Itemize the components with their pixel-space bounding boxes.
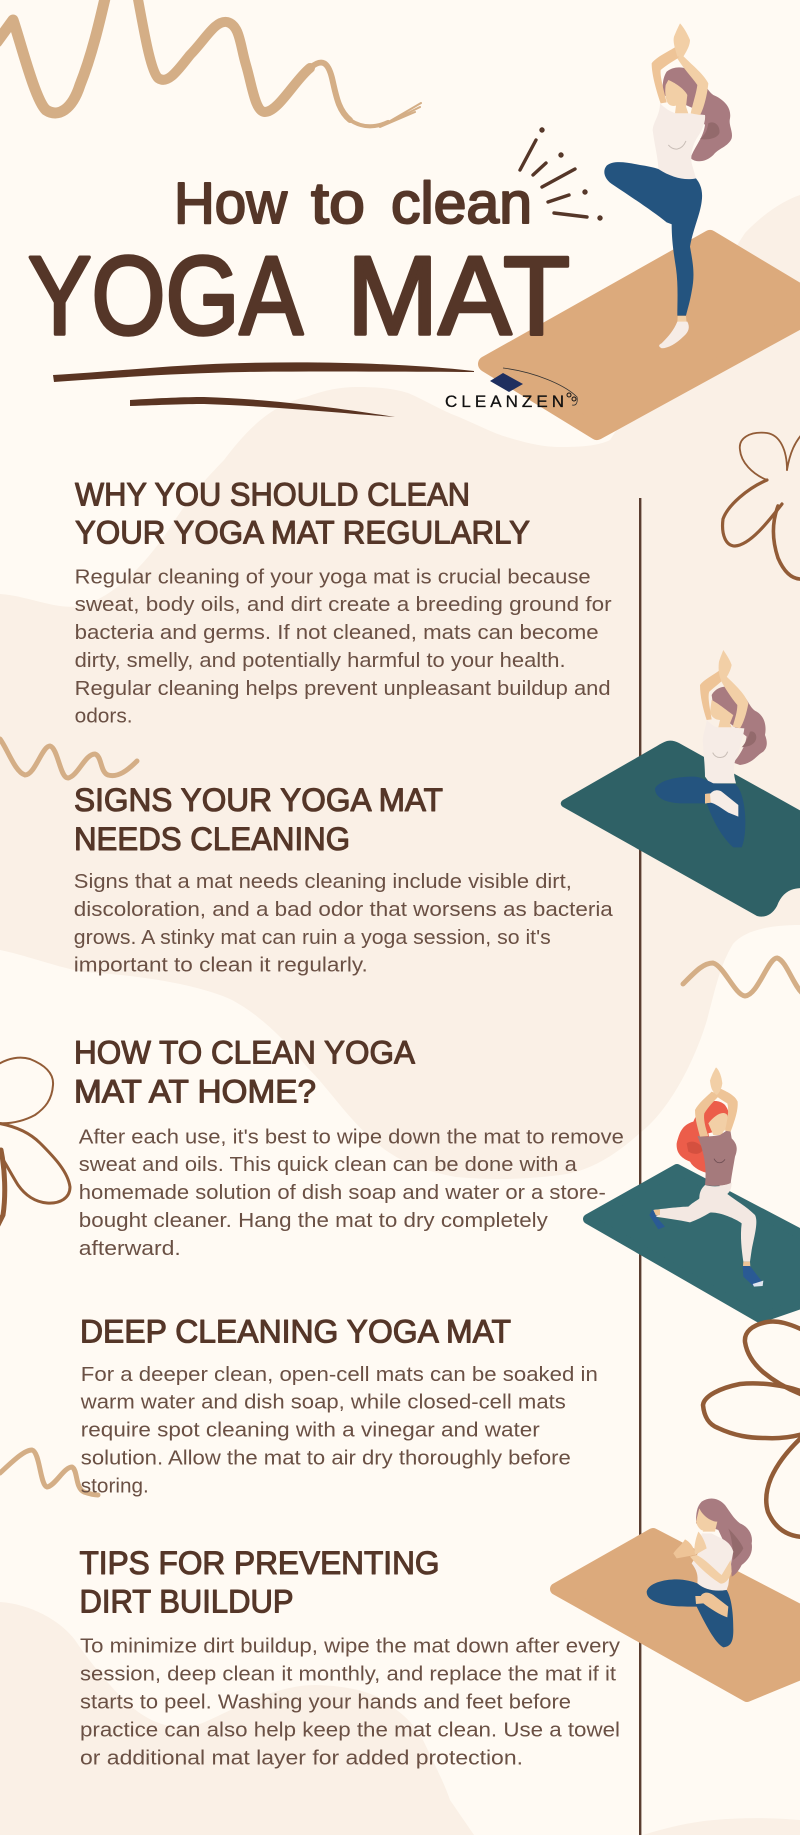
body text — [75, 565, 612, 728]
logo: Cleanzen — [445, 368, 577, 411]
flower: left — [0, 1058, 70, 1225]
body text: Regular cleaning of your yoga mat is crucial because — [75, 565, 591, 588]
title line two: YOGA — [28, 234, 303, 358]
body text: discoloration, and a bad odor that worsens as bacteria — [74, 898, 613, 921]
divider line — [639, 498, 641, 1835]
body text — [80, 1635, 621, 1770]
figure: standing tree pose — [604, 23, 732, 348]
body text: session, deep clean it monthly, and replace the mat if it — [80, 1663, 616, 1686]
body text — [80, 1363, 598, 1498]
body text: dirty, smelly, and potentially harmful to your health. — [75, 649, 566, 672]
title line one: clean — [391, 171, 532, 236]
heading: TIPS FOR PREVENTING — [80, 1545, 440, 1581]
heading: MAT AT HOME? — [74, 1074, 316, 1110]
body text: To minimize dirt buildup, wipe the mat down after every — [80, 1635, 621, 1658]
heading: YOUR YOGA MAT REGULARLY — [75, 514, 530, 550]
body text: After each use, it's best to wipe down the mat to remove — [79, 1125, 624, 1148]
title line one — [174, 171, 532, 236]
body text: bought cleaner. Hang the mat to dry completely — [79, 1209, 549, 1232]
figure: seated namaste — [647, 1498, 752, 1647]
heading: WHY YOU SHOULD CLEAN — [75, 476, 470, 512]
heading — [80, 1545, 440, 1619]
body text: For a deeper clean, open-cell mats can be soaked in — [81, 1363, 598, 1386]
body text: starts to peel. Washing your hands and feet before — [80, 1691, 571, 1714]
logo wordmark: CLEANZEN — [445, 392, 564, 411]
body text: practice can also help keep the mat clean. Use a towel — [80, 1719, 620, 1742]
body text: sweat and oils. This quick clean can be done with a — [79, 1153, 577, 1176]
heading: DIRT BUILDUP — [80, 1583, 294, 1619]
title line one: to — [311, 171, 365, 236]
body text: require spot cleaning with a vinegar and water — [81, 1419, 540, 1442]
section: clean at home — [74, 1034, 624, 1260]
flower: right lower — [703, 1321, 800, 1537]
body text — [79, 1125, 624, 1260]
body text — [74, 870, 613, 977]
mat: teal one — [561, 741, 800, 917]
body text: Signs that a mat needs cleaning include visible dirt, — [74, 870, 572, 893]
body text: important to clean it regularly. — [74, 954, 368, 977]
heading: HOW TO CLEAN YOGA — [74, 1034, 415, 1070]
section: tips — [80, 1545, 621, 1770]
hero mat: tan — [486, 238, 800, 432]
title line one: How — [174, 171, 288, 236]
body text: Regular cleaning helps prevent unpleasant buildup and — [75, 677, 611, 700]
mat: tan two — [556, 1534, 800, 1696]
section: why clean — [75, 476, 612, 728]
body text: solution. Allow the mat to air dry thoroughly before — [81, 1447, 571, 1470]
heading — [74, 782, 443, 857]
body text: sweat, body oils, and dirt create a breeding ground for — [75, 593, 612, 616]
body text: warm water and dish soap, while closed-cell mats — [80, 1391, 566, 1414]
body text: or additional mat layer for added protection. — [80, 1747, 523, 1770]
title line two — [28, 234, 570, 358]
body text: storing. — [81, 1475, 149, 1498]
brush underlines — [53, 362, 474, 417]
body text: grows. A stinky mat can ruin a yoga session, so it's — [74, 926, 551, 949]
icon: sparkle lines — [520, 129, 601, 219]
squiggle: right middle — [683, 958, 800, 996]
title — [28, 171, 570, 358]
heading — [74, 1034, 415, 1110]
squiggle: above signs heading — [0, 739, 137, 778]
squiggle: top left — [0, 0, 421, 127]
title line two: MAT — [347, 234, 570, 358]
heading: SIGNS YOUR YOGA MAT — [74, 782, 443, 818]
heading: NEEDS CLEANING — [74, 821, 350, 857]
squiggle: left lower — [0, 1450, 98, 1495]
heading: DEEP CLEANING YOGA MAT — [80, 1313, 511, 1349]
figure: lunge pose — [649, 1067, 763, 1287]
body text: homemade solution of dish soap and water or a store- — [79, 1181, 606, 1204]
mat: teal two — [588, 1169, 800, 1318]
body text: bacteria and germs. If not cleaned, mats can become — [75, 621, 599, 644]
section: deep cleaning — [80, 1313, 598, 1498]
heading — [75, 476, 530, 550]
flower: top right — [723, 433, 800, 579]
section: signs — [74, 782, 613, 977]
figure: seated arms raised — [655, 650, 767, 847]
body text: afterward. — [79, 1237, 181, 1260]
body text: odors. — [75, 705, 133, 728]
icon: phone — [490, 373, 523, 392]
